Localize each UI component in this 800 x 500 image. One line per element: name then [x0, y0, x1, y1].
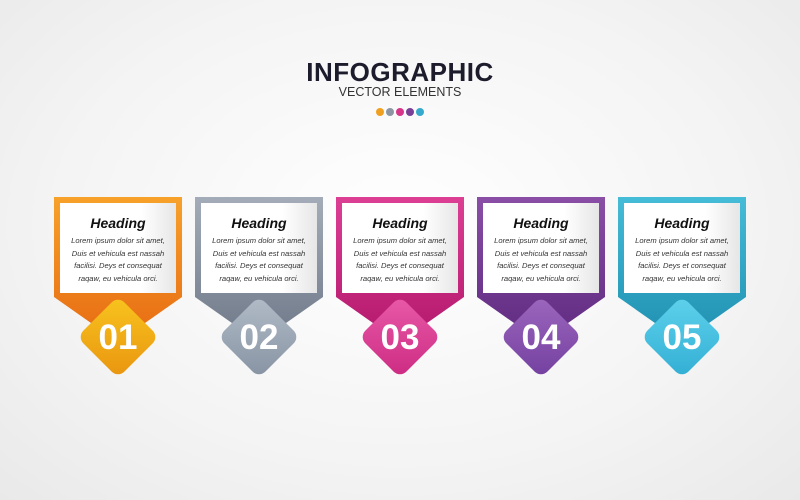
card 03: raqaw, eu vehicula orci. — [360, 274, 440, 282]
card 04: 04 — [522, 318, 560, 357]
card 02: Duis et vehicula est nassah — [213, 248, 305, 258]
card 04: Heading — [513, 215, 569, 231]
card 04 — [477, 197, 605, 374]
card 03 — [336, 197, 464, 374]
card 05: Heading — [654, 215, 710, 231]
title: INFOGRAPHIC — [306, 57, 494, 87]
card 04: raqaw, eu vehicula orci. — [501, 274, 581, 282]
card 05: 05 — [663, 318, 701, 357]
card 03: Heading — [372, 215, 428, 231]
card 01: 01 — [99, 318, 137, 357]
card 04: facilisi. Deys et consequat — [497, 261, 585, 270]
card 05: Duis et vehicula est nassah — [636, 248, 728, 258]
card 02: facilisi. Deys et consequat — [215, 261, 303, 270]
card 01: Heading — [90, 215, 146, 231]
card 03: 03 — [381, 318, 419, 357]
card 04: Lorem ipsum dolor sit amet, — [494, 236, 588, 245]
card 05: Lorem ipsum dolor sit amet, — [635, 236, 729, 245]
card 05: raqaw, eu vehicula orci. — [642, 274, 722, 282]
card 03: facilisi. Deys et consequat — [356, 261, 444, 270]
card 02 — [195, 197, 323, 374]
color dots — [376, 108, 424, 116]
card 02: raqaw, eu vehicula orci. — [219, 274, 299, 282]
card 01: Lorem ipsum dolor sit amet, — [71, 236, 165, 245]
card 01: raqaw, eu vehicula orci. — [78, 274, 158, 282]
card 03: Lorem ipsum dolor sit amet, — [353, 236, 447, 245]
card 01: facilisi. Deys et consequat — [74, 261, 162, 270]
subtitle: VECTOR ELEMENTS — [339, 85, 461, 99]
card 04: Duis et vehicula est nassah — [495, 248, 587, 258]
card 02: Lorem ipsum dolor sit amet, — [212, 236, 306, 245]
card 05 — [618, 197, 746, 374]
card 03: Duis et vehicula est nassah — [354, 248, 446, 258]
card 02: 02 — [240, 318, 278, 357]
card 02: Heading — [231, 215, 287, 231]
card 01 — [54, 197, 182, 374]
card 01: Duis et vehicula est nassah — [72, 248, 164, 258]
card 05: facilisi. Deys et consequat — [638, 261, 726, 270]
